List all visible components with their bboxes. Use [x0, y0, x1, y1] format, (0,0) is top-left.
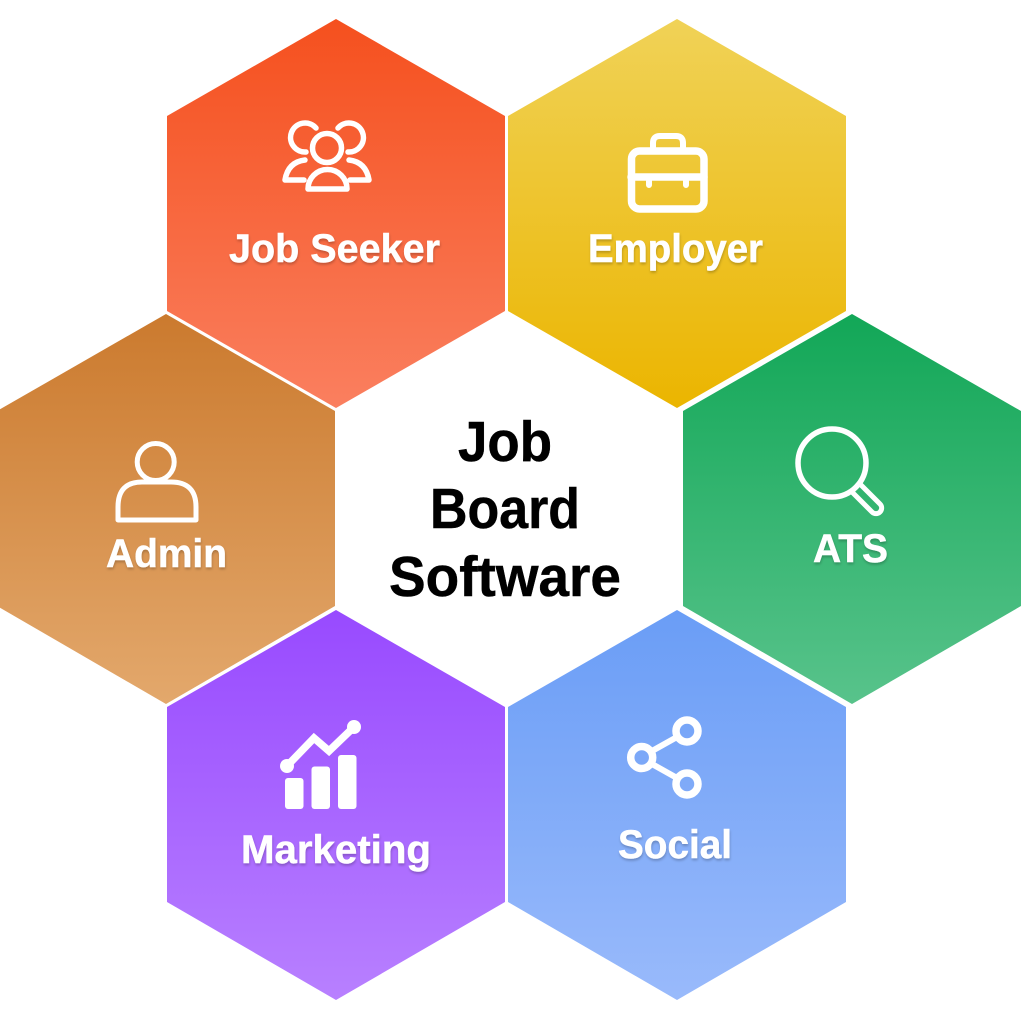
- icon: person: [118, 444, 196, 520]
- hexagon: Marketing: [167, 610, 505, 1000]
- icon: share: [631, 720, 698, 795]
- icon: magnifying glass: [798, 429, 882, 514]
- hexagon: Social: [508, 610, 846, 1000]
- label: Job Seeker: Job Seeker: [229, 227, 440, 271]
- panel: Social: [508, 610, 846, 1000]
- title: Job Board Software: Board: [430, 477, 580, 541]
- label: Marketing: Marketing: [241, 828, 431, 872]
- label: Admin: Admin: [106, 532, 227, 576]
- panel: ATS: [683, 314, 1021, 704]
- panel: Marketing: [167, 610, 505, 1000]
- hexagon: Employer: [508, 19, 846, 408]
- hexagon: Admin: [0, 314, 335, 704]
- panel: Job Seeker: [167, 19, 505, 408]
- label: Employer: Employer: [588, 227, 763, 271]
- title: Job Board Software: Job: [458, 410, 552, 474]
- label: Social: Social: [618, 823, 732, 867]
- panel: Admin: [0, 314, 335, 704]
- title: Job Board Software: Software: [389, 545, 621, 609]
- title: Job Board Software: [389, 410, 621, 609]
- label: ATS: ATS: [813, 527, 888, 571]
- hexagon: ATS: [683, 314, 1021, 704]
- icon: group of people: [285, 123, 369, 189]
- icon: briefcase: [631, 136, 704, 209]
- hexagon: Job Seeker: [167, 19, 505, 408]
- panel: Employer: [508, 19, 846, 408]
- icon: growth chart: [280, 720, 361, 809]
